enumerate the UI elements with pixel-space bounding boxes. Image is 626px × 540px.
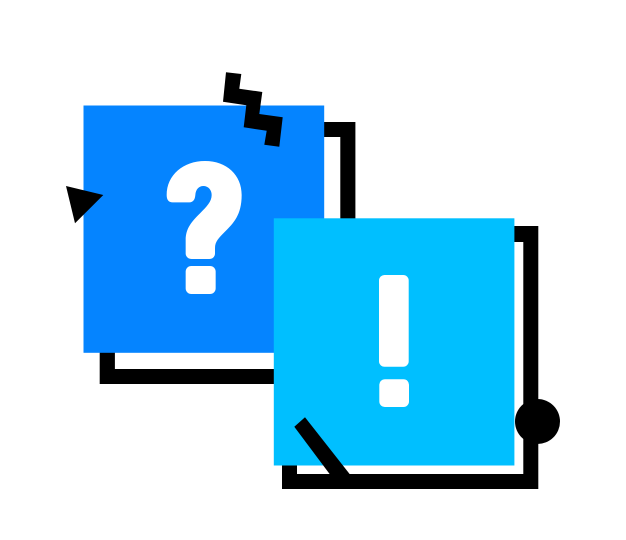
icon: zigzag (223, 72, 283, 147)
icon: circle (515, 399, 560, 444)
panel: exclamation square outline (282, 226, 538, 489)
icon: diagonal line (294, 417, 350, 474)
icon: question mark (167, 161, 242, 294)
icon: exclamation mark (379, 275, 409, 407)
panel: question square outline (100, 122, 355, 384)
icon: triangle (66, 186, 103, 223)
panel: exclamation square (274, 218, 514, 466)
panel: question square (84, 106, 324, 353)
